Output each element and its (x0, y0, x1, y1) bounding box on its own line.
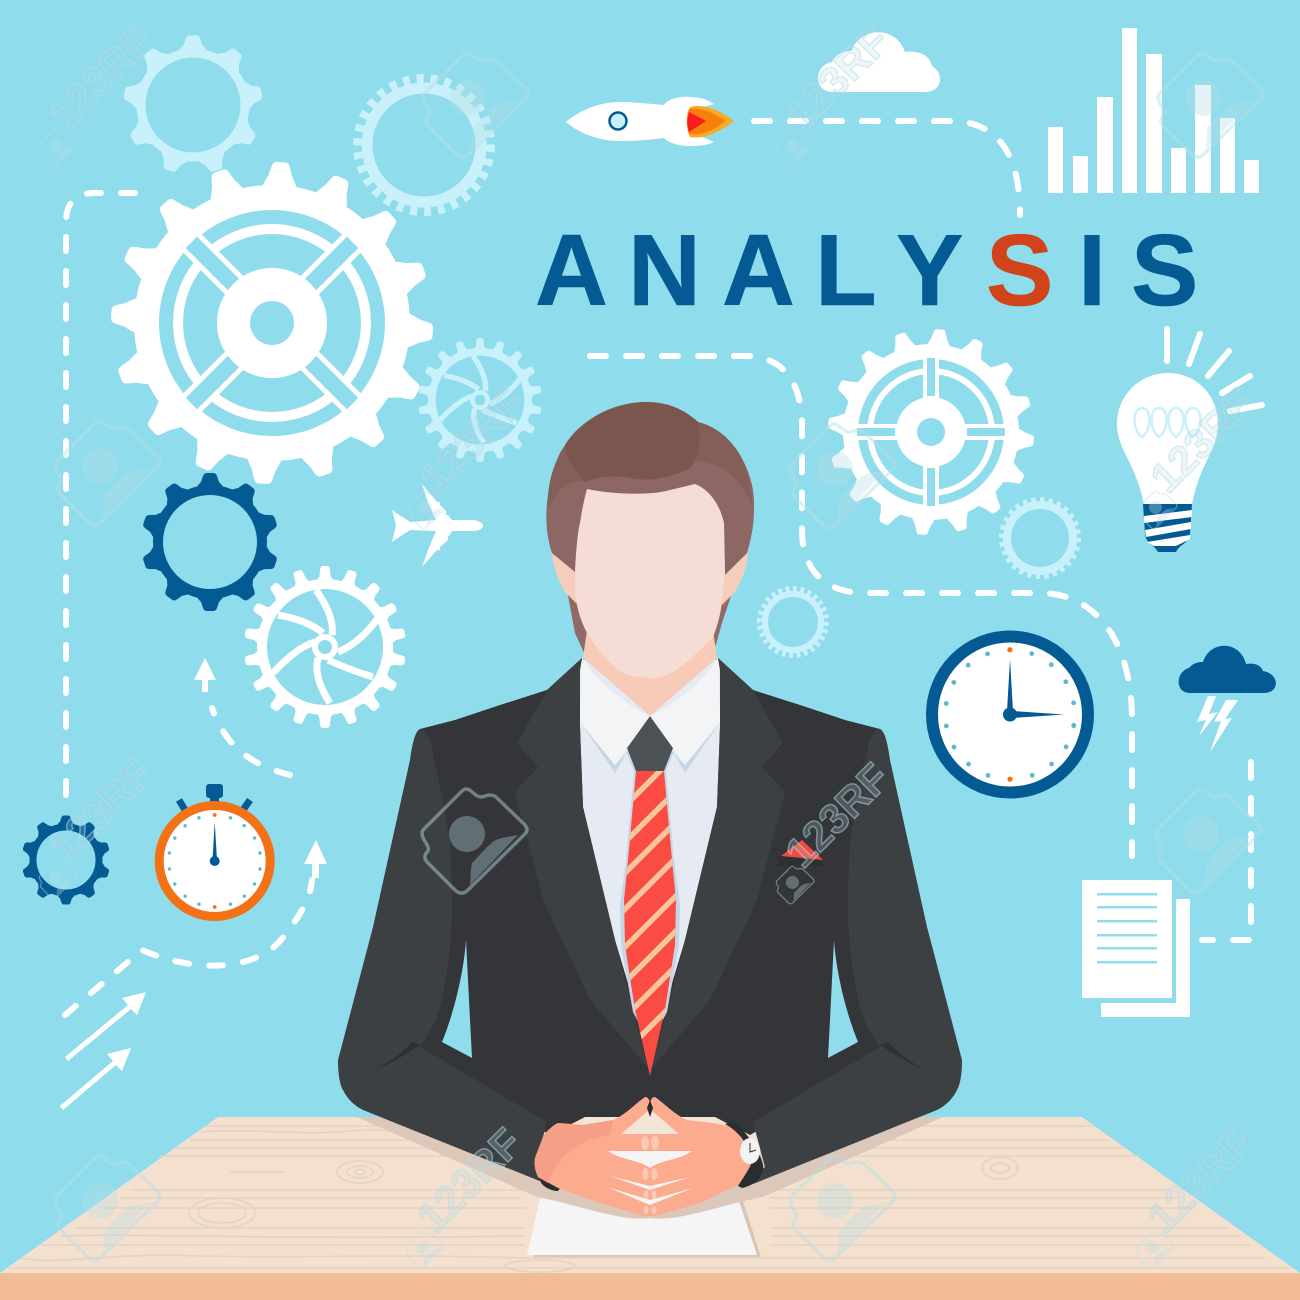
icon: clock (932, 636, 1088, 792)
finger gaps (608, 1151, 692, 1168)
gear: small light right (1002, 500, 1078, 576)
watch (725, 1122, 763, 1188)
title: ANALYSIS: ANALYSIS (535, 215, 1198, 327)
tie (624, 716, 676, 1076)
shirt placket shadow (620, 740, 680, 1045)
watermark: 123RF: 123RF (39, 749, 162, 871)
thumb shading (535, 1120, 613, 1183)
sleeve: left (338, 729, 557, 1188)
icon: light bulb (1117, 329, 1262, 552)
arrows: growth (60, 992, 146, 1110)
gap: right of torso (828, 940, 858, 1058)
collar: left (580, 657, 650, 765)
gap between index fingers (621, 1110, 679, 1134)
icon: airplane (392, 484, 483, 567)
gear: white aperture (231, 553, 419, 741)
nails (641, 1136, 659, 1214)
watermark: 123RF: 123RF (776, 17, 899, 139)
table (0, 1117, 1300, 1300)
gear: light top left (122, 35, 264, 175)
gear: small light centre (760, 589, 826, 655)
dashed path: centre to document (590, 356, 1132, 856)
person (338, 402, 962, 1216)
gear: right white (819, 320, 1043, 544)
icon: rocket (566, 97, 734, 146)
sleeve shadow on table (357, 1117, 943, 1219)
dashed path: rocket trail (754, 121, 1020, 215)
icon: storm cloud (1179, 646, 1276, 752)
dashed path: left vertical (66, 193, 140, 795)
dashed arrow: upper left (194, 658, 290, 775)
hands (535, 1097, 752, 1216)
cuff: left (540, 1173, 562, 1191)
watermark: 123RF: 123RF (408, 1119, 531, 1241)
icon: stopwatch (159, 784, 270, 916)
collar shadow (580, 722, 720, 773)
face (575, 484, 725, 678)
hand: left (535, 1097, 650, 1216)
wood grain (8, 1126, 1290, 1272)
gear: light aperture (408, 328, 552, 472)
gear: blue (123, 454, 297, 630)
gear: light top centre (358, 79, 490, 211)
tip gap (647, 1100, 653, 1117)
watermark: 123RF: 123RF (776, 754, 899, 876)
pocket square (778, 840, 825, 866)
dashed path: right to document (1202, 762, 1251, 940)
hair back (567, 590, 733, 655)
dashed arrow: lower left (65, 840, 327, 1015)
watermark: 123RF: 123RF (39, 17, 162, 139)
watermark: 123RF: 123RF (1141, 379, 1264, 501)
elbow creases (373, 1042, 927, 1070)
gear: large white (102, 153, 442, 493)
gear: small blue (10, 803, 122, 917)
icon: cloud (818, 32, 940, 92)
ears (552, 553, 748, 605)
bar chart (1048, 28, 1259, 193)
lapel: right (652, 658, 785, 1068)
hair (546, 402, 754, 575)
lapel: left (515, 658, 648, 1068)
watermark: 123RF: 123RF (411, 379, 534, 501)
neck (583, 630, 717, 716)
hand: right (650, 1097, 752, 1216)
icon: documents (1082, 880, 1190, 1017)
gap: left of torso (442, 940, 472, 1058)
paper on table (527, 1117, 761, 1257)
shirt (580, 660, 720, 1050)
collar: right (650, 657, 720, 765)
neck and torso jacket (405, 658, 895, 1135)
watermark: 123RF: 123RF (1138, 1119, 1261, 1241)
sleeve: right (743, 729, 962, 1188)
